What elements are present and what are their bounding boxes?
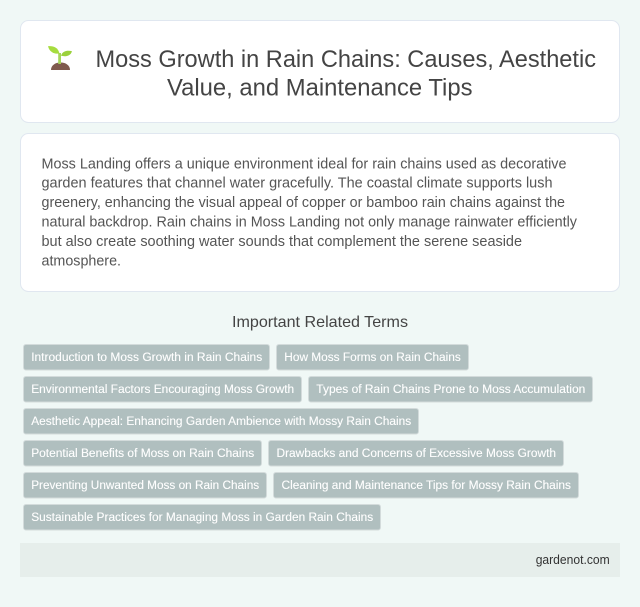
title (96, 46, 596, 102)
description text: Moss Landing offers a unique environment ideal for rain chains used as decorative (42, 156, 566, 172)
tag: Sustainable Practices for Managing Moss in Garden Rain Chains (31, 510, 373, 524)
tag: Drawbacks and Concerns of Excessive Moss Growth (276, 446, 556, 460)
tag (24, 504, 380, 530)
tag: Preventing Unwanted Moss on Rain Chains (31, 478, 259, 492)
title: Value, and Maintenance Tips (167, 74, 472, 102)
heading: important related terms: Important Related Terms (232, 314, 408, 331)
tag (274, 472, 578, 498)
description text: but also create soothing water sounds that complement the serene seaside (42, 234, 522, 250)
tag (24, 376, 302, 402)
description text: atmosphere. (42, 253, 121, 269)
tag: How Moss Forms on Rain Chains (284, 350, 461, 364)
footer bar (20, 543, 620, 577)
tag: Introduction to Moss Growth in Rain Chains (31, 350, 262, 364)
tag (308, 376, 592, 402)
tag (276, 344, 468, 370)
tag (268, 440, 564, 466)
tag (24, 408, 418, 434)
tag: Cleaning and Maintenance Tips for Mossy Rain Chains (282, 478, 571, 492)
panel: description (20, 134, 620, 292)
tag (24, 440, 262, 466)
tag: Aesthetic Appeal: Enhancing Garden Ambience with Mossy Rain Chains (31, 414, 411, 428)
description text (42, 156, 578, 269)
title: Moss Growth in Rain Chains: Causes, Aesthetic (96, 46, 596, 73)
footer site name: gardenot.com (536, 552, 610, 567)
icon: seedling (48, 46, 72, 70)
description text: greenery, enhancing the visual appeal of copper or bamboo rain chains against the (42, 195, 565, 211)
tag (24, 344, 270, 370)
related terms tags (24, 344, 592, 530)
tag: Potential Benefits of Moss on Rain Chains (31, 446, 254, 460)
description text: garden features that channel water gracefully. The coastal climate supports lush (42, 176, 552, 192)
tag: Types of Rain Chains Prone to Moss Accumulation (316, 382, 585, 396)
tag (24, 472, 266, 498)
tag: Environmental Factors Encouraging Moss Growth (31, 382, 294, 396)
description text: natural backdrop. Rain chains in Moss Landing not only manage rainwater efficiently (42, 214, 578, 230)
panel: title card (20, 20, 620, 122)
